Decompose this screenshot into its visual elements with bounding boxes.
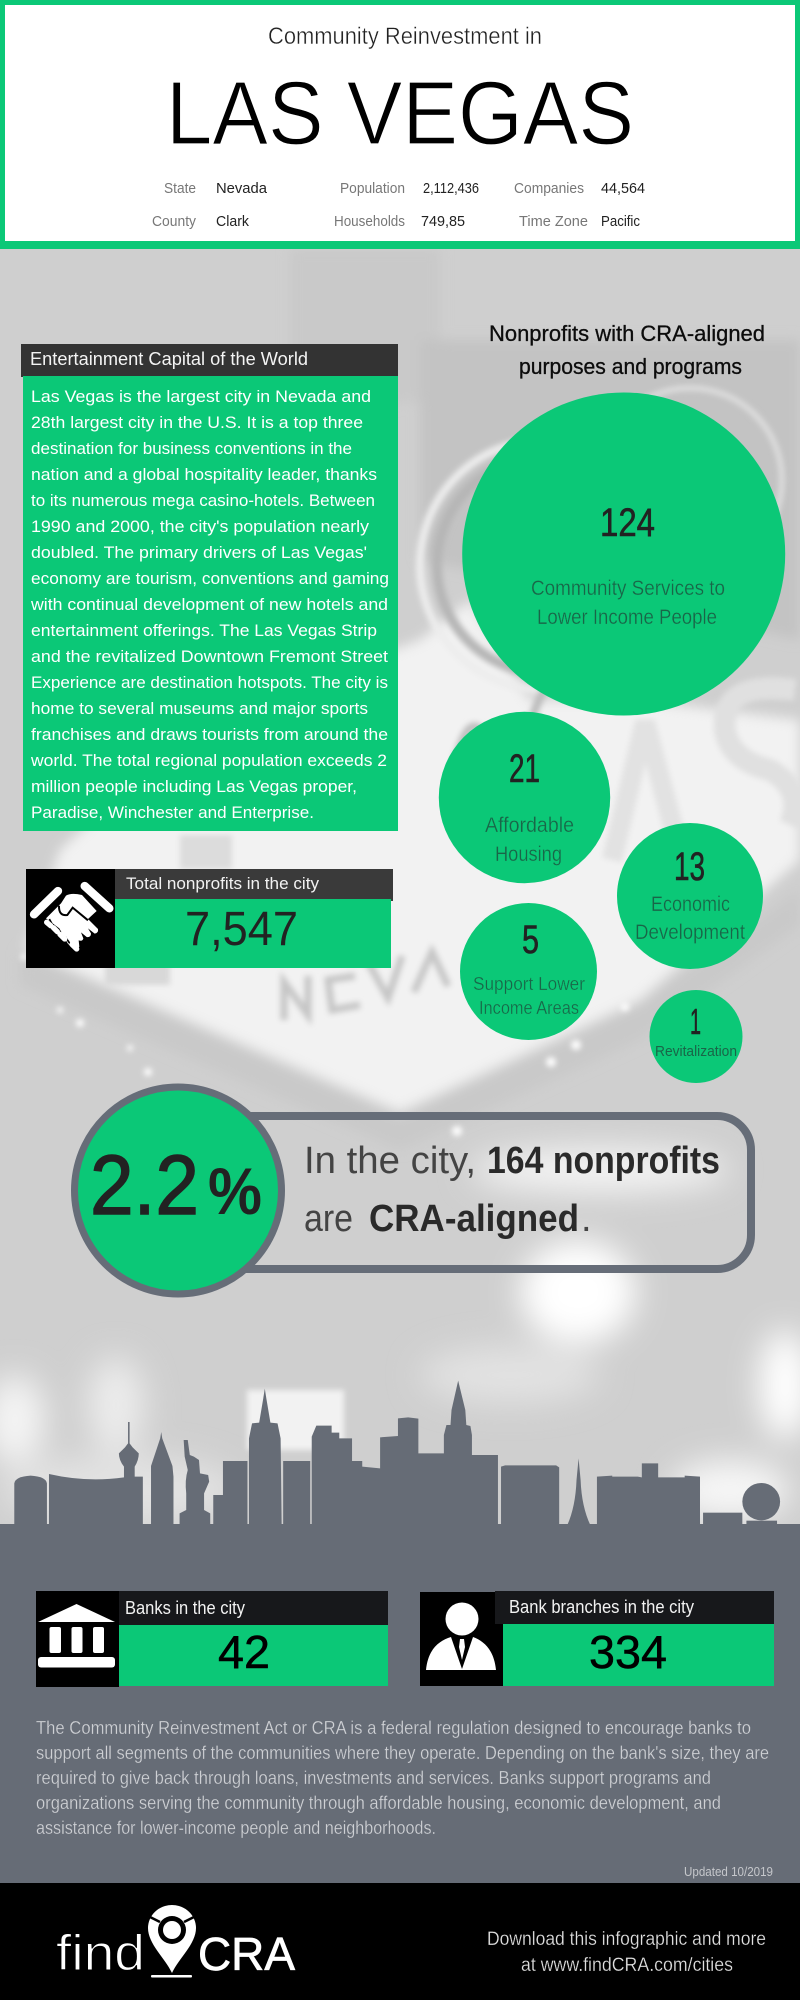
panel body text: doubled. The primary drivers of Las Vegas' (31, 543, 367, 562)
heading: nonprofits with CRA-aligned purposes: Nonprofits with CRA-aligned (489, 321, 765, 346)
bubble: revitalization: 1 (690, 1001, 701, 1042)
bubble: economic development (617, 823, 763, 969)
panel body text: nation and a global hospitality leader, thanks (31, 465, 377, 484)
percentage: % (208, 1154, 262, 1228)
text: about the CRA: organizations serving the community through affordable housing, economic development, and (36, 1793, 721, 1813)
bubble: affordable housing: Housing (495, 843, 562, 866)
city facts: Pacific (601, 213, 640, 230)
panel body text: Experience are destination hotspots. The city is (31, 673, 388, 692)
stat value: 42 (218, 1626, 270, 1678)
background photo: blurred Las Vegas sign (0, 249, 800, 1539)
bubble: support lower income areas (460, 903, 597, 1040)
subtitle: Community Reinvestment in (268, 23, 542, 50)
icon: business person (426, 1602, 496, 1670)
heading: nonprofits with CRA-aligned purposes (489, 321, 765, 379)
panel body text: 28th largest city in the U.S. It is a top three (31, 413, 363, 432)
city facts: Companies (514, 180, 584, 197)
text: about the CRA: assistance for lower-income people and neighborhoods. (36, 1818, 436, 1838)
panel body text: world. The total regional population exceeds 2 (30, 751, 387, 770)
text: about the CRA: The Community Reinvestment Act or CRA is a federal regulation designed to encourage banks to (36, 1718, 751, 1738)
bubble: community services: Lower Income People (537, 606, 717, 629)
logo: findCRA (56, 1905, 295, 1981)
stat value: 334 (589, 1626, 667, 1678)
city facts (152, 180, 645, 230)
download call to action: Download this infographic and more (487, 1929, 766, 1950)
panel body text: home to several museums and major sports (31, 699, 368, 718)
city facts: State (164, 180, 196, 197)
bubble: support lower income areas: Income Areas (479, 998, 579, 1018)
stat: total nonprofits (26, 869, 393, 968)
bubble: community services (462, 392, 785, 716)
bubble: revitalization: Revitalization (655, 1043, 737, 1060)
panel body text: entertainment offerings. The Las Vegas Strip (31, 621, 377, 640)
bubble: community services: 124 (600, 501, 655, 545)
callout text: 164 nonprofits (487, 1140, 720, 1182)
panel body text: and the revitalized Downtown Fremont Street (31, 647, 388, 666)
header panel (0, 0, 800, 249)
bubble: affordable housing (439, 712, 610, 883)
callout text: . (581, 1198, 592, 1240)
bubble: economic development: Development (635, 921, 745, 944)
stat: banks in the city (36, 1591, 388, 1687)
heading: nonprofits with CRA-aligned purposes: purposes and programs (519, 354, 742, 379)
section: banks background (0, 1524, 800, 1884)
download call to action (487, 1929, 766, 1976)
city facts: 749,85 (421, 213, 465, 230)
bubble: economic development: Economic (651, 893, 730, 916)
panel body text: economy are tourism, conventions and gaming (31, 569, 389, 588)
city facts: Clark (216, 213, 249, 230)
icon: location pin (148, 1905, 196, 1978)
skyline silhouette (14, 1381, 780, 1526)
bubble: affordable housing: Affordable (485, 814, 574, 837)
logo: findCRA: CRA (198, 1928, 295, 1980)
panel body text: million people including Las Vegas proper, (31, 777, 357, 796)
title: LAS VEGAS (166, 64, 634, 164)
stat value: 7,547 (185, 903, 298, 956)
city facts: Time Zone (519, 213, 588, 230)
updated date: Updated 10/2019 (684, 1864, 773, 1879)
panel body text: with continual development of new hotels and (30, 595, 388, 614)
panel body text: Las Vegas is the largest city in Nevada and (31, 387, 371, 406)
panel heading: Entertainment Capital of the World (30, 349, 308, 369)
panel body text: destination for business conventions in the (31, 439, 352, 458)
city facts: 44,564 (601, 180, 645, 197)
panel body text: to its numerous mega casino-hotels. Between (31, 491, 375, 510)
stat label: Total nonprofits in the city (126, 874, 319, 893)
bubble: support lower income areas: Support Lower (473, 974, 585, 994)
city facts: County (152, 213, 196, 230)
stat label: Bank branches in the city (509, 1597, 694, 1617)
callout text (304, 1140, 720, 1240)
callout text: CRA-aligned (369, 1198, 579, 1240)
logo: findCRA: find (56, 1925, 145, 1981)
download call to action: at www.findCRA.com/cities (521, 1955, 733, 1976)
city facts: Nevada (216, 180, 268, 197)
callout text: In the city, (304, 1140, 476, 1182)
footer (0, 1883, 800, 2000)
percentage: 2.2 (90, 1138, 199, 1232)
callout: CRA-aligned share (74, 1087, 751, 1294)
panel body text: franchises and draws tourists from around the (31, 725, 388, 744)
panel: entertainment capital (21, 344, 398, 831)
text: about the CRA: required to give back through loans, investments and services. Banks support programs and (36, 1768, 711, 1788)
icon: bank building (38, 1604, 115, 1668)
panel body text (30, 387, 389, 822)
percentage (90, 1138, 262, 1232)
icon: handshake (34, 886, 109, 952)
bubble: economic development: 13 (674, 845, 705, 889)
bubble: community services: Community Services to (531, 577, 725, 600)
city facts: Households (334, 213, 405, 230)
city facts: 2,112,436 (423, 180, 479, 197)
callout text: are (304, 1198, 353, 1240)
text: about the CRA (36, 1718, 769, 1838)
stat label: Banks in the city (125, 1598, 245, 1618)
panel body text: Paradise, Winchester and Enterprise. (31, 803, 314, 822)
stat: bank branches (420, 1591, 774, 1686)
bubble: revitalization (650, 990, 742, 1083)
city facts: Population (340, 180, 405, 197)
panel body text: 1990 and 2000, the city's population nearly (31, 517, 370, 536)
bubble: affordable housing: 21 (509, 747, 540, 791)
bubble: support lower income areas: 5 (522, 918, 539, 962)
